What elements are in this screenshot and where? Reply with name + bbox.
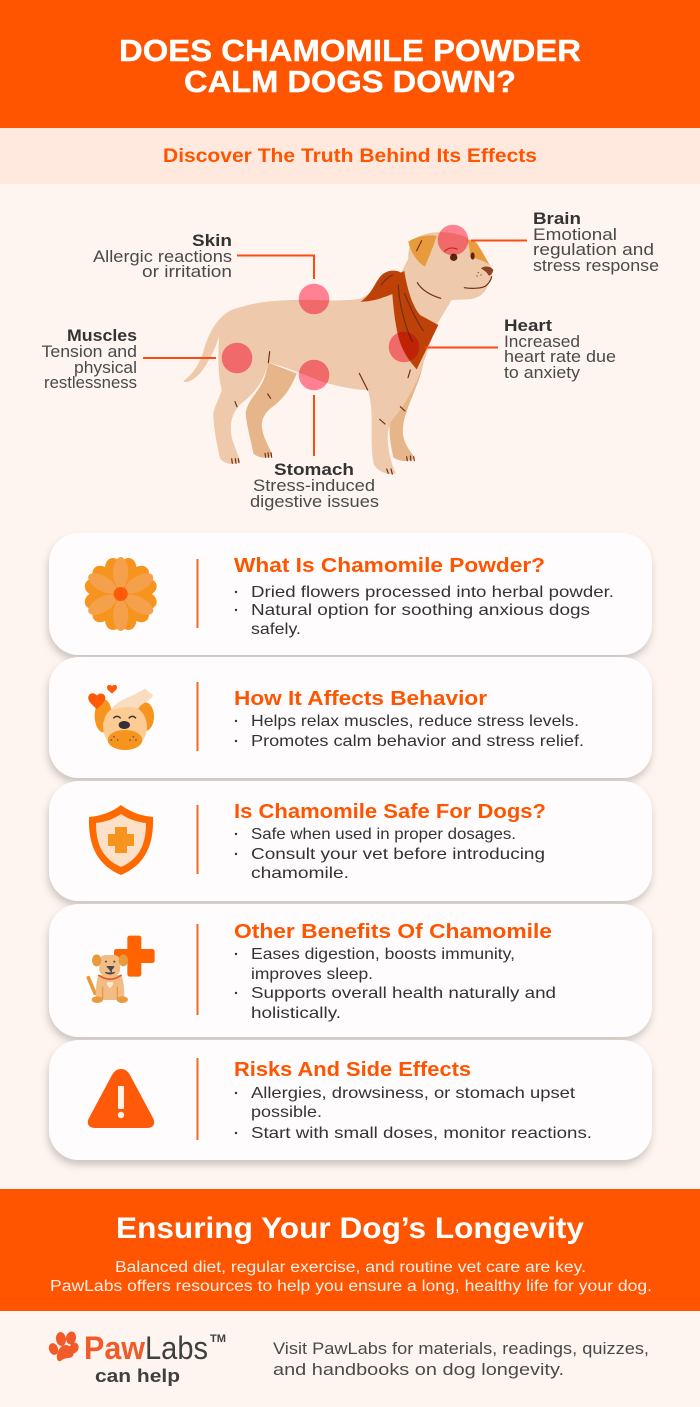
subtitle band <box>0 128 700 184</box>
highlight circles <box>222 225 468 390</box>
text: what is chamomile powder: Natural option for soothing anxious dogs <box>251 602 590 619</box>
title <box>119 33 581 99</box>
panel: risks and side effects <box>49 1040 652 1160</box>
label: stomach: Stress-induced <box>253 477 375 495</box>
label: heart <box>504 316 616 382</box>
label: brain: regulation and <box>533 241 654 259</box>
dog anatomy diagram <box>42 209 659 511</box>
logo: PawLabs can help: can help <box>95 1366 180 1386</box>
label: muscles: Tension and <box>42 343 137 361</box>
text: other benefits of chamomile: Supports overall health naturally and <box>251 985 556 1002</box>
icon: sitting dog with plus sign <box>88 936 155 1003</box>
text: other benefits of chamomile <box>234 920 556 1022</box>
text: other benefits of chamomile: Other Benefits Of Chamomile <box>234 920 552 943</box>
icon: happy dog being petted <box>88 685 154 750</box>
label: stomach <box>250 460 379 511</box>
text: risks and side effects: Risks And Side Effects <box>234 1058 471 1081</box>
header banner <box>0 0 700 128</box>
label: muscles: Muscles <box>67 326 137 345</box>
title: CALM DOGS DOWN? <box>184 64 516 99</box>
text: visit pawlabs <box>273 1339 649 1379</box>
label: heart: Heart <box>504 316 552 335</box>
dog body <box>183 232 492 474</box>
label: brain: Emotional <box>533 226 617 244</box>
text: risks and side effects: possible. <box>251 1104 322 1121</box>
logo: PawLabs can help <box>47 1330 226 1386</box>
icon: paw print <box>47 1331 80 1361</box>
label: stomach: Stomach <box>274 460 354 479</box>
face details <box>444 248 493 277</box>
panel: is chamomile safe for dogs <box>49 781 652 901</box>
label: muscles: restlessness <box>44 374 137 392</box>
panel: what is chamomile powder <box>49 533 652 655</box>
footer banner: ensuring your dog's longevity: Balanced diet, regular exercise, and routine vet care are key. <box>115 1259 586 1276</box>
panel: other benefits of chamomile <box>49 904 652 1037</box>
footer banner: ensuring your dog's longevity <box>0 1189 700 1311</box>
ears <box>408 235 489 267</box>
label: skin <box>93 231 232 281</box>
icon: warning triangle <box>88 1069 154 1128</box>
text: what is chamomile powder: safely. <box>251 621 301 638</box>
text: risks and side effects: Start with small doses, monitor reactions. <box>251 1125 592 1142</box>
label: heart: heart rate due <box>504 348 616 366</box>
label: brain: stress response <box>533 257 659 275</box>
label: skin: Allergic reactions <box>93 248 232 266</box>
text: is chamomile safe for dogs: Is Chamomile Safe For Dogs? <box>234 800 546 823</box>
text: what is chamomile powder: Dried flowers processed into herbal powder. <box>251 584 614 601</box>
text: is chamomile safe for dogs: Consult your vet before introducing <box>251 846 545 863</box>
icon: chamomile flower <box>83 556 159 632</box>
footer banner: ensuring your dog's longevity: PawLabs offers resources to help you ensure a long, healthy life for your dog. <box>50 1278 652 1295</box>
subtitle band: Discover The Truth Behind Its Effects <box>163 146 537 167</box>
text: visit pawlabs: and handbooks on dog longevity. <box>273 1360 564 1379</box>
label: stomach: digestive issues <box>250 493 379 511</box>
fur and scarf lines <box>232 241 492 474</box>
label: brain <box>533 209 659 275</box>
text: how it affects behavior: Promotes calm behavior and stress relief. <box>251 733 584 750</box>
text: risks and side effects <box>234 1058 592 1142</box>
label: skin: Skin <box>192 231 232 250</box>
label: skin: or irritation <box>142 263 232 281</box>
connector lines <box>143 240 527 456</box>
text: other benefits of chamomile: holistically. <box>251 1005 341 1022</box>
logo: PawLabs can help: Paw <box>84 1330 145 1366</box>
text: is chamomile safe for dogs <box>234 800 546 882</box>
far legs <box>246 363 423 461</box>
title: DOES CHAMOMILE POWDER <box>119 33 581 68</box>
text: other benefits of chamomile: improves sleep. <box>251 966 373 983</box>
icon: shield with cross <box>89 805 153 875</box>
logo: PawLabs can help: TM <box>210 1333 226 1345</box>
text: how it affects behavior <box>234 687 584 750</box>
text: other benefits of chamomile: Eases digestion, boosts immunity, <box>251 946 515 963</box>
logo: PawLabs can help: Labs <box>145 1330 208 1366</box>
label: heart: to anxiety <box>504 364 581 382</box>
text: how it affects behavior: Helps relax muscles, reduce stress levels. <box>251 713 579 730</box>
text: is chamomile safe for dogs: chamomile. <box>251 865 349 882</box>
text: what is chamomile powder <box>234 554 614 638</box>
text: visit pawlabs: Visit PawLabs for materials, readings, quizzes, <box>273 1339 649 1358</box>
text: what is chamomile powder: What Is Chamomile Powder? <box>234 554 545 577</box>
label: heart: Increased <box>504 333 580 351</box>
scarf <box>360 271 438 369</box>
label: muscles <box>42 326 137 392</box>
text: is chamomile safe for dogs: Safe when used in proper dosages. <box>251 826 516 843</box>
label: muscles: physical <box>74 359 137 377</box>
footer banner: ensuring your dog's longevity: Ensuring Your Dog’s Longevity <box>116 1212 584 1245</box>
label: brain: Brain <box>533 209 581 228</box>
dog illustration <box>183 232 493 474</box>
panel: how it affects behavior <box>49 657 652 778</box>
text: risks and side effects: Allergies, drowsiness, or stomach upset <box>251 1085 576 1102</box>
text: how it affects behavior: How It Affects Behavior <box>234 687 487 710</box>
